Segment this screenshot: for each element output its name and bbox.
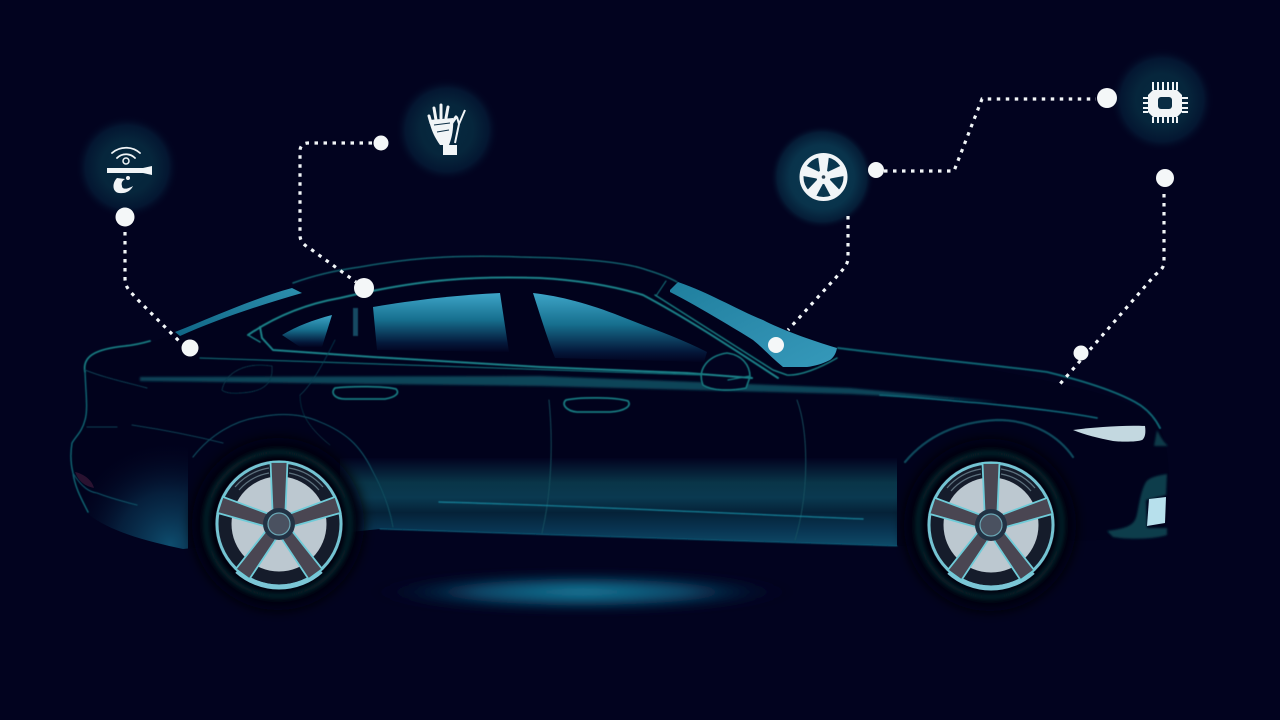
front wheel — [904, 439, 1076, 611]
icon: microchip — [1110, 48, 1214, 152]
dotted connectors — [125, 99, 1164, 384]
belt line band — [140, 376, 1000, 402]
mirror fill — [701, 353, 750, 390]
fog light — [1147, 497, 1166, 526]
outline strokes — [71, 256, 1160, 546]
side glow bands — [96, 461, 897, 549]
rear door window — [373, 293, 509, 352]
connector: hand icon to roof — [300, 143, 372, 282]
connector: chip icon to wheel icon — [884, 99, 1096, 171]
icon: robotic hand — [395, 78, 499, 182]
rear tail light — [75, 472, 94, 488]
rear wheel — [192, 438, 364, 610]
rear quarter window — [282, 315, 332, 347]
windscreen — [670, 282, 837, 367]
car — [60, 255, 1169, 611]
connected car infographic — [70, 55, 1207, 614]
floor glow under car — [367, 572, 797, 612]
fender corner — [1154, 430, 1168, 446]
front door window — [533, 293, 707, 362]
pillar sliver — [353, 308, 358, 336]
connector: wheel icon to windscreen — [788, 216, 848, 330]
car body — [72, 255, 1169, 549]
connector nodes — [116, 88, 1174, 360]
bumper intake surround — [1107, 474, 1167, 539]
icon: wheel — [770, 125, 874, 229]
headlight — [1073, 426, 1145, 442]
connector: wifi icon to rear deck — [125, 232, 180, 342]
connector: bonnet to upper right — [1060, 194, 1164, 384]
rear glass strip — [175, 288, 302, 336]
icon: wifi connectivity key — [75, 115, 179, 219]
